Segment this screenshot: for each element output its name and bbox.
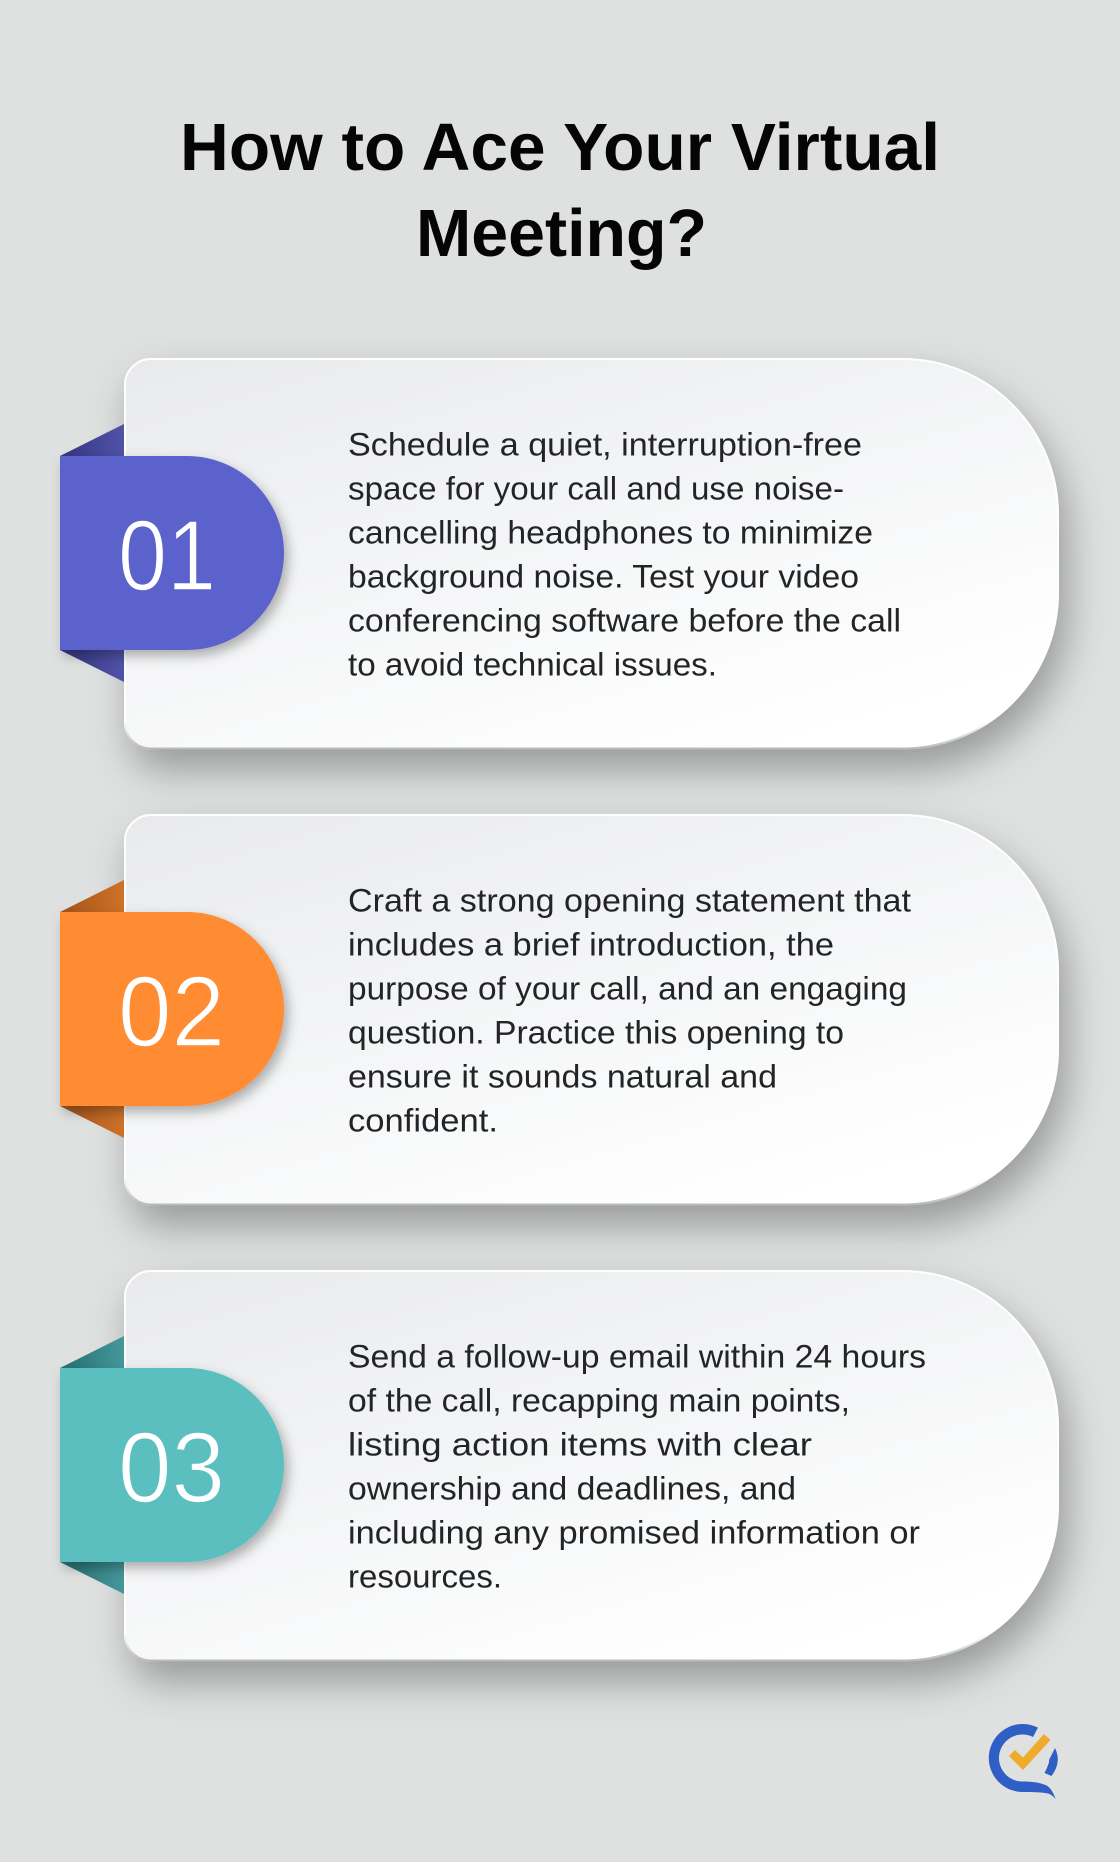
text 02: ensure it sounds natural and — [348, 1059, 777, 1095]
text 01 — [348, 427, 901, 683]
number badge 02 — [60, 912, 284, 1106]
text 03: including any promised information or — [348, 1515, 920, 1551]
title — [180, 110, 940, 271]
card 03 — [125, 1271, 1058, 1660]
text 02: includes a brief introduction, the — [348, 927, 834, 963]
text 01: conferencing software before the call — [348, 603, 901, 639]
number 02: 02 — [118, 956, 225, 1068]
number badge 03 — [60, 1368, 284, 1562]
text 02: question. Practice this opening to — [348, 1015, 844, 1051]
card 01 — [125, 359, 1058, 748]
panel: step 02 — [60, 815, 1058, 1204]
text 02: purpose of your call, and an engaging — [348, 971, 907, 1007]
number 03: 03 — [118, 1412, 225, 1524]
panel: step 01 — [60, 359, 1058, 748]
text 02 — [348, 883, 911, 1139]
title: Meeting? — [416, 196, 707, 271]
text 01: Schedule a quiet, interruption-free — [348, 427, 862, 463]
number badge 01 — [60, 456, 284, 650]
text 03 — [348, 1339, 926, 1595]
text 03: of the call, recapping main points, — [348, 1383, 850, 1419]
text 03: listing action items with clear — [348, 1427, 812, 1463]
text 03: resources. — [348, 1559, 502, 1595]
text 02: Craft a strong opening statement that — [348, 883, 911, 919]
text 02: confident. — [348, 1103, 498, 1139]
ribbon folds 02 — [60, 880, 124, 1138]
text 03: Send a follow-up email within 24 hours — [348, 1339, 926, 1375]
ribbon folds 03 — [60, 1336, 124, 1594]
number 01: 01 — [118, 500, 216, 612]
icon: logo — [989, 1724, 1058, 1799]
panel: step 03 — [60, 1271, 1058, 1660]
title: How to Ace Your Virtual — [180, 110, 940, 185]
card 02 — [125, 815, 1058, 1204]
text 01: to avoid technical issues. — [348, 647, 717, 683]
text 01: background noise. Test your video — [348, 559, 859, 595]
text 03: ownership and deadlines, and — [348, 1471, 796, 1507]
text 01: cancelling headphones to minimize — [348, 515, 873, 551]
ribbon folds 01 — [60, 424, 124, 682]
text 01: space for your call and use noise- — [348, 471, 844, 507]
